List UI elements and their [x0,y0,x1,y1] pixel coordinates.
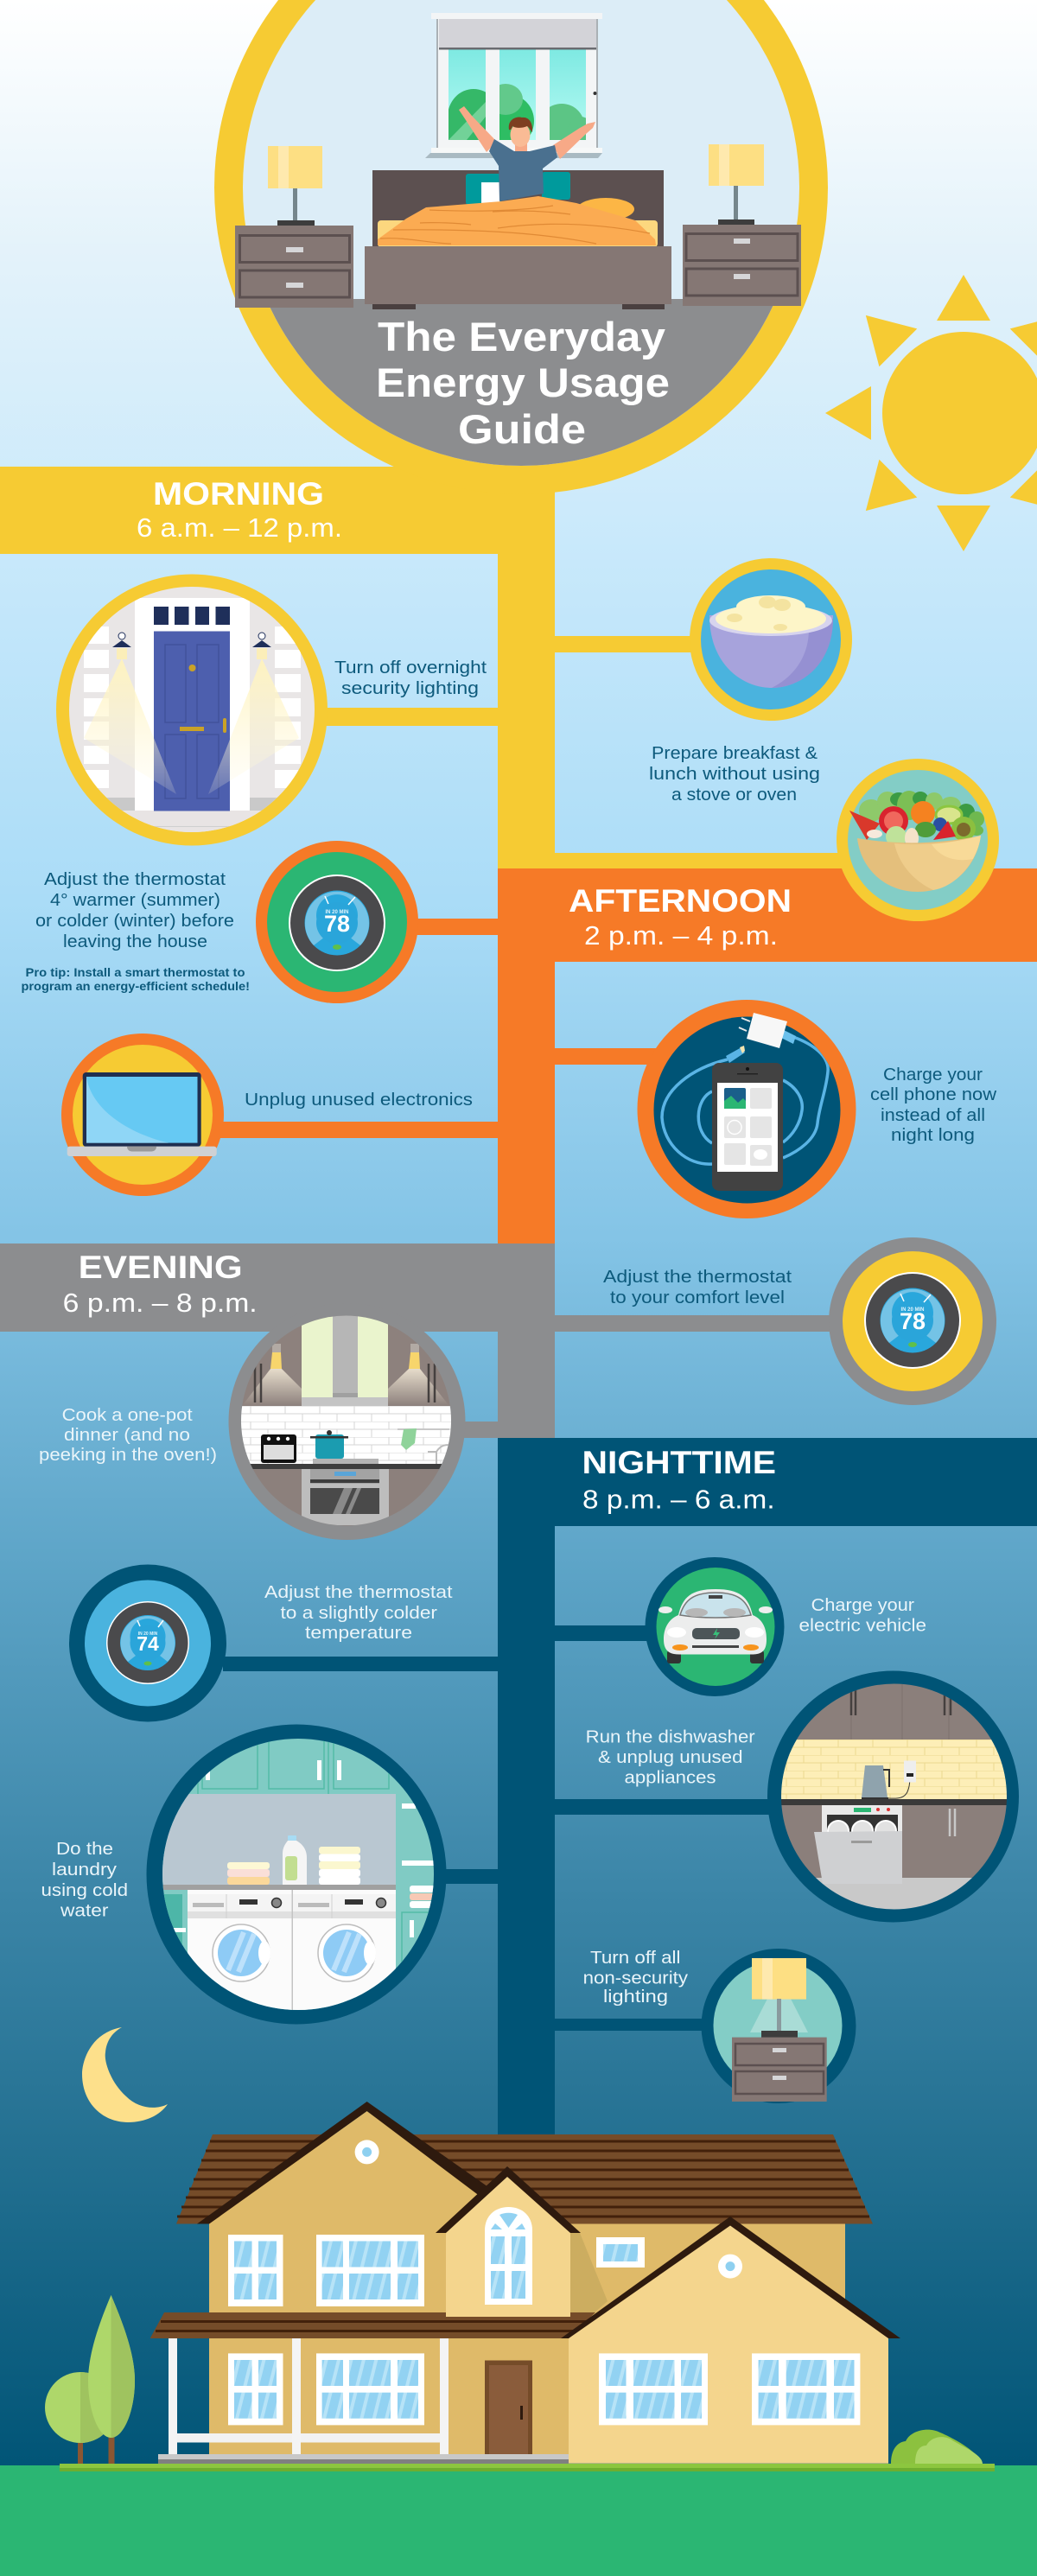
heading: nighttime [582,1445,776,1514]
icon: toaster oven [261,1434,296,1463]
icon: blue door [154,631,230,811]
icon: stove and oven [302,1459,389,1525]
panel: dishwasher kitchen [767,1671,1019,1922]
dormer shadow [570,2233,608,2312]
text: do the laundry: water [60,1901,109,1920]
text: adjust the thermostat warmer or colder: or colder (winter) before [35,911,234,931]
text: run the dishwasher: Run the dishwasher [586,1727,755,1747]
icon: window [425,13,602,158]
text: turn off security lighting [334,658,487,698]
text: adjust to colder temperature [264,1582,453,1643]
text: adjust to comfort level [603,1267,792,1307]
text: turn off non-security lighting: lighting [603,1987,668,2007]
floor [270,299,773,466]
porch floor [158,2454,569,2464]
lower left wall [209,2338,569,2464]
icon: wall lamps [112,633,271,659]
text: turn off non-security lighting: Turn off all [590,1948,681,1968]
porch roof [150,2312,595,2338]
text: charge electric vehicle [798,1595,926,1635]
panel: laundry room [147,1725,446,2024]
text: do the laundry: using cold [41,1880,128,1900]
icon: smart thermostat: 78 [900,1308,926,1334]
text: charge your cell phone: instead of all [881,1105,985,1125]
panel: thermostat 78 on yellow [829,1237,996,1405]
panel: bedside lamp [702,1949,856,2103]
icon: dryer [293,1890,396,2015]
text: do the laundry: Do the [56,1839,113,1859]
icon: smart thermostat [289,875,385,971]
icon: smart thermostat [864,1272,961,1369]
title: The Everyday [378,314,665,359]
icon: electric vehicle [658,1589,773,1663]
icon: outlet [904,1761,916,1782]
icon: smart thermostat: 74 [137,1632,159,1655]
text: charge your cell phone [870,1065,996,1145]
heading: evening: EVENING [79,1250,243,1285]
text: adjust to comfort level: Adjust the thermostat [603,1267,792,1287]
pillows [466,172,570,205]
icon: smartphone [712,1063,783,1191]
heading: afternoon [569,883,792,951]
text: turn off non-security lighting: non-security [583,1968,689,1988]
icon: pot [310,1430,348,1459]
text: turn off security lighting: security lighting [341,678,479,698]
text: cook a one-pot dinner: Cook a one-pot [62,1405,193,1425]
icon: smart thermostat [106,1601,189,1684]
text: adjust to comfort level: to your comfort level [610,1288,785,1307]
upper left window [228,2235,283,2306]
upper cabinets [197,1740,390,1794]
right gable wing [561,2217,900,2464]
title: Energy Usage [376,359,670,405]
text: pro tip: program an energy-efficient schedule! [21,979,250,993]
icon: washer [188,1890,292,2015]
text: prepare breakfast [649,743,820,805]
text: adjust to colder temperature: Adjust the thermostat [264,1582,453,1602]
text: cook a one-pot dinner [39,1405,217,1465]
charging cable [662,1037,828,1164]
heading: morning: MORNING [153,476,324,512]
icon: sun [825,275,1037,551]
text: run the dishwasher: & unplug unused [598,1747,743,1767]
arched window [485,2207,532,2305]
text: charge electric vehicle: electric vehicle [798,1616,926,1635]
lawn strip [60,2464,995,2471]
timeline bars and spine [0,467,1037,2138]
heading: evening [63,1250,258,1318]
icon: dishwasher [814,1805,902,1884]
ground [0,2465,1037,2576]
text: cook a one-pot dinner: peeking in the oven!) [39,1445,217,1465]
text: turn off security lighting: Turn off overnight [334,658,487,677]
text: adjust the thermostat warmer or colder: leaving the house [63,932,207,951]
small window [596,2237,645,2268]
text: charge electric vehicle: Charge your [811,1595,914,1615]
panel: phone charger [638,1000,856,1218]
salad greens [859,791,984,836]
headboard [372,170,664,250]
icon: nightstand [732,2038,827,2102]
text: turn off non-security lighting [583,1948,689,2007]
panel: electric car [645,1557,785,1696]
heading: morning: 6 a.m. – 12 p.m. [137,512,342,543]
icon: smart thermostat: IN 20 MIN [138,1631,158,1637]
icon: crescent moon [82,2027,168,2122]
icon: towels and detergent [227,1835,360,1885]
heading: afternoon: AFTERNOON [569,883,792,919]
towel and faucet [398,1428,449,1464]
lower middle window [316,2353,424,2425]
text: prepare breakfast: a stove or oven [671,785,797,805]
upper wall [209,2224,845,2340]
text: pro tip: Pro tip: Install a smart thermostat to [26,965,245,979]
text: run the dishwasher: appliances [624,1768,716,1787]
text: charge your cell phone: night long [891,1125,975,1145]
text: prepare breakfast: Prepare breakfast & [652,743,818,763]
panel: laptop [61,1034,224,1196]
panel: front door lighting [52,574,328,845]
panel: salad bowl [837,759,999,921]
nightstand and lamp right [683,144,801,306]
text: adjust the thermostat warmer or colder: Adjust the thermostat [44,869,226,889]
bed base [365,246,671,309]
right windows [599,2353,860,2425]
trees [45,2295,135,2464]
panel: thermostat 78 on green [256,841,418,1003]
nightstand and lamp left [235,146,353,308]
panel: bowl of oatmeal [690,558,852,721]
text: run the dishwasher [586,1727,755,1787]
left gable [197,2102,491,2238]
text: unplug unused electronics: Unplug unused electronics [245,1090,473,1110]
transom panes [154,607,230,625]
mattress [378,220,658,247]
person stretching [459,106,595,201]
icon: smart thermostat: 78 [324,911,350,937]
icon: lamp [752,1958,806,2038]
bush [891,2430,983,2464]
text: do the laundry [41,1839,128,1920]
heading: nighttime: NIGHTTIME [582,1445,776,1480]
backsplash [233,1406,460,1464]
heading: morning [137,476,342,543]
text: adjust the thermostat warmer or colder: 4° warmer (summer) [50,890,220,910]
heading: afternoon: 2 p.m. – 4 p.m. [584,920,778,951]
text: adjust the thermostat warmer or colder [35,869,234,951]
lamp light cones [84,658,176,794]
title: Guide [458,406,586,452]
center dormer [436,2166,581,2317]
title [376,314,670,452]
charger plug [739,1013,787,1048]
porch columns and railing [169,2338,449,2454]
panel: thermostat 74 [69,1564,226,1721]
text: charge your cell phone: Charge your [883,1065,983,1084]
text: cook a one-pot dinner: dinner (and no [64,1425,190,1445]
text: adjust to colder temperature: to a slightly colder [280,1603,437,1623]
text: pro tip [21,965,250,993]
text: do the laundry: laundry [52,1860,118,1880]
under-cabinet lights [242,1344,449,1406]
main roof [176,2134,873,2224]
heading: evening: 6 p.m. – 8 p.m. [63,1288,258,1318]
icon: smart thermostat: IN 20 MIN [325,910,349,915]
front door [485,2361,532,2454]
text: charge your cell phone: cell phone now [870,1084,996,1104]
lower left window [228,2353,283,2425]
icon: kettle [862,1765,910,1799]
heading: nighttime: 8 p.m. – 6 a.m. [582,1485,775,1514]
text: prepare breakfast: lunch without using [649,764,820,784]
panel: bedroom hero circle [214,0,830,498]
text: adjust to colder temperature: temperature [305,1623,412,1643]
panel: kitchen stove [228,1303,465,1540]
house [150,2102,900,2464]
blanket [378,196,656,245]
icon: smart thermostat: IN 20 MIN [900,1307,925,1313]
upper middle window [316,2235,424,2306]
